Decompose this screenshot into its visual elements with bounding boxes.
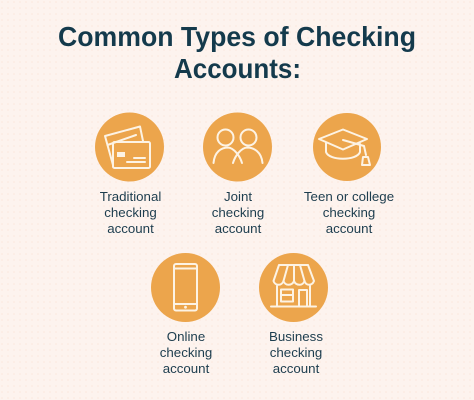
- label: account: [273, 361, 320, 376]
- label: checking: [104, 205, 157, 220]
- title: Accounts:: [174, 53, 301, 84]
- icon: credit cards: [95, 112, 164, 182]
- label: account: [326, 221, 373, 236]
- icon: graduation cap: [313, 113, 381, 181]
- label: Traditional: [100, 189, 161, 204]
- label: checking: [270, 345, 322, 360]
- title: Common Types of Checking: [58, 21, 416, 52]
- item: joint checking account: [203, 112, 272, 236]
- label: checking: [323, 205, 375, 220]
- label: Joint: [224, 189, 252, 204]
- label: checking: [212, 205, 264, 220]
- title: [58, 21, 416, 84]
- label: checking: [160, 345, 212, 360]
- icon: storefront: [259, 253, 328, 322]
- label: account: [215, 221, 262, 236]
- item: teen or college checking account: [304, 113, 394, 236]
- label: Teen or college: [304, 189, 394, 204]
- icon: smartphone: [151, 253, 220, 322]
- label: account: [163, 361, 210, 376]
- label: Business: [269, 329, 323, 344]
- item: business checking account: [259, 253, 328, 376]
- label: Online: [167, 329, 205, 344]
- item: traditional checking account: [95, 112, 164, 236]
- label: account: [107, 221, 154, 236]
- item: online checking account: [151, 253, 220, 376]
- icon: two people: [203, 112, 272, 182]
